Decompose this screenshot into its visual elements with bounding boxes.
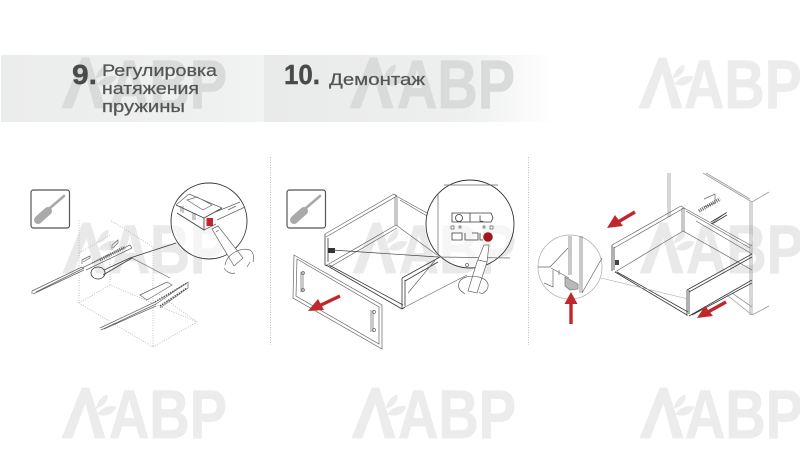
arrow: pull drawer lower (697, 302, 726, 318)
panel: drawer front removal (287, 180, 514, 349)
heading: step 9 title: натяжения (102, 79, 199, 98)
illustration: leader lines (103, 243, 176, 275)
illustration: dotted cabinet (79, 220, 197, 347)
callout: magnified latch (538, 235, 602, 299)
label: L marker: L (479, 214, 484, 224)
divider: left (270, 157, 272, 345)
illustration: lower drawer runner (100, 282, 188, 330)
watermark: top middle: АВР (397, 46, 515, 123)
watermark: middle left: АВР (110, 211, 227, 288)
illustration: cabinet (668, 173, 769, 315)
watermark: bottom left (62, 376, 227, 450)
watermark: middle centre: АВР (399, 211, 516, 288)
arrow: pull drawer upper (607, 212, 635, 228)
panel: drawer removal (538, 173, 769, 324)
illustration: front panel (293, 255, 382, 349)
heading: step 10 number: 10. (284, 59, 320, 90)
heading: step 10 title: Демонтаж (329, 70, 426, 89)
banner: step 9 background (1, 55, 264, 122)
callout: magnified spring adjuster (171, 183, 254, 273)
heading: step 9 number: 9. (72, 59, 97, 90)
watermark: middle left (63, 211, 227, 288)
icon: screwdriver tool box (287, 190, 326, 228)
watermark: bottom centre (352, 376, 516, 450)
panel: spring tension adjustment (31, 183, 254, 347)
banner: step 10 background (264, 55, 554, 122)
illustration: upper drawer runner (32, 240, 170, 294)
illustration: small detail circle (91, 267, 105, 279)
heading: step 9 title: пружины (102, 97, 185, 116)
watermark: top left (62, 46, 227, 123)
watermark: top left: АВР (109, 46, 227, 123)
callout: magnified release mechanism (426, 180, 514, 294)
illustration: drawer box (325, 194, 467, 309)
arrow: latch up (564, 292, 578, 324)
illustration: rear runner (699, 194, 727, 224)
divider: right (528, 157, 530, 345)
illustration: pulled out drawer (601, 206, 752, 316)
watermark: middle centre (353, 211, 516, 288)
arrow: pull front panel (308, 296, 340, 311)
icon: screwdriver tool box (31, 190, 70, 228)
heading: step 9 title: Регулировка (102, 61, 218, 80)
watermark: top middle (350, 46, 515, 123)
heading: step 9 title (102, 61, 218, 116)
